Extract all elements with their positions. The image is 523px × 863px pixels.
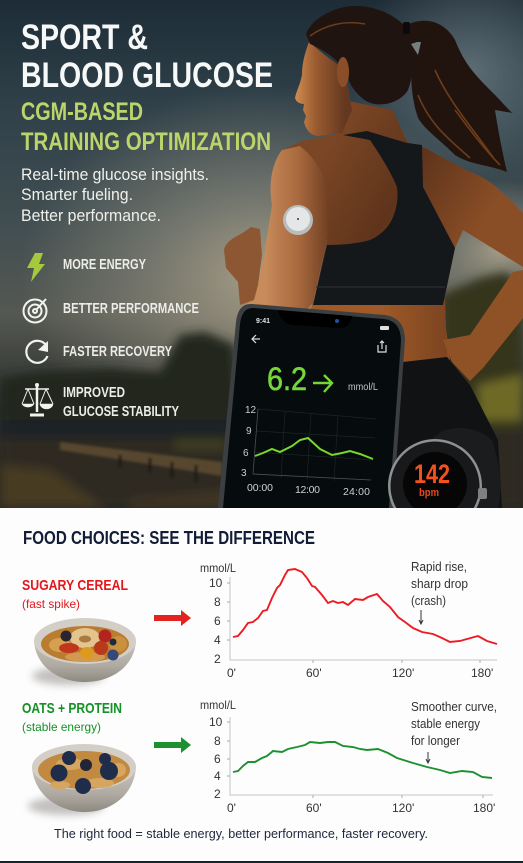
benefit: more energy — [27, 253, 146, 282]
heart rate reading: 142 — [414, 459, 450, 489]
label: oats + protein — [22, 700, 122, 734]
face and neck — [295, 42, 352, 136]
benefit: improved glucose stability: GLUCOSE STABILITY — [63, 404, 179, 420]
arrow: green — [154, 737, 191, 753]
title: SPORT & — [21, 18, 148, 57]
hand — [224, 227, 262, 305]
CGM sensor — [283, 205, 313, 235]
chart: sugary cereal: 6 — [214, 614, 221, 628]
chart: sugary cereal: 4 — [214, 633, 221, 647]
phone glucose chart: 24:00 — [343, 486, 370, 498]
bowl: sugary cereal — [32, 618, 136, 685]
watch crown — [478, 488, 487, 499]
phone glucose chart — [241, 405, 376, 498]
title — [21, 18, 273, 95]
chart: sugary cereal: 180' — [471, 666, 493, 680]
chart: oats + protein: mmol/L — [200, 698, 236, 712]
benefit: improved glucose stability — [22, 384, 179, 420]
benefit: faster recovery — [26, 341, 172, 363]
trend arrow — [313, 375, 332, 392]
unit label: mmol/L — [348, 381, 378, 393]
hero panel — [0, 0, 523, 533]
guard rail — [60, 442, 222, 482]
annotation: smoother curve: stable energy — [411, 717, 481, 731]
bowl: oats — [28, 744, 136, 815]
chart: oats + protein: 120' — [392, 801, 414, 815]
subtitle: CGM-BASED — [21, 98, 143, 126]
tagline — [21, 166, 209, 225]
bottom bar — [0, 861, 523, 863]
chart: oats + protein: 0' — [227, 801, 236, 815]
annotation: smoother curve: Smoother curve, — [411, 700, 497, 714]
chart: oats + protein — [200, 698, 497, 815]
right forearm and hand on hip — [443, 270, 523, 381]
title: BLOOD GLUCOSE — [21, 56, 273, 95]
arrow: red — [154, 610, 191, 626]
phone glucose chart: 12:00 — [295, 484, 320, 496]
chart: sugary cereal: 8 — [214, 595, 221, 609]
chart: oats + protein: 2 — [214, 787, 221, 801]
back arrow — [252, 335, 260, 343]
background: tree line and road — [0, 272, 523, 508]
label: oats + protein: (stable energy) — [22, 720, 101, 734]
waist — [300, 300, 447, 364]
bpm label: bpm — [419, 487, 439, 499]
chart: sugary cereal: 60' — [306, 666, 322, 680]
label: sugary cereal: (fast spike) — [22, 597, 80, 611]
torso and shoulders — [282, 100, 523, 364]
annotation: rapid rise: (crash) — [411, 594, 446, 608]
sports bra — [313, 131, 455, 305]
food panel — [0, 508, 523, 861]
footer statement: The right food = stable energy, better performance, faster recovery. — [54, 826, 428, 841]
phone status bar: 9:41 — [256, 318, 270, 325]
phone — [218, 304, 405, 508]
annotation: smoother curve: for longer — [411, 734, 460, 748]
phone glucose chart: 12 — [245, 405, 257, 416]
chart: oats + protein: 60' — [306, 801, 322, 815]
tagline: Better performance. — [21, 207, 161, 225]
chart: sugary cereal: 120' — [392, 666, 414, 680]
tagline: Real-time glucose insights. — [21, 166, 209, 184]
watch — [388, 428, 500, 533]
chart: oats + protein: 8 — [214, 734, 221, 748]
ear — [337, 57, 349, 87]
benefit: better performance — [24, 299, 199, 322]
benefit: more energy: MORE ENERGY — [63, 257, 146, 273]
chart: oats + protein: 6 — [214, 752, 221, 766]
left upper arm — [240, 146, 328, 320]
subtitle — [21, 98, 271, 156]
phone glucose chart: 3 — [241, 468, 247, 479]
hair — [306, 6, 412, 104]
chart: sugary cereal — [200, 560, 497, 680]
phone glucose chart: 00:00 — [247, 482, 273, 494]
chart: sugary cereal: 2 — [214, 652, 221, 666]
label: sugary cereal: SUGARY CEREAL — [22, 577, 128, 594]
chart: oats + protein: 180' — [473, 801, 495, 815]
share icon — [378, 341, 386, 352]
annotation: rapid rise — [411, 560, 468, 624]
annotation: rapid rise: sharp drop — [411, 577, 468, 591]
label: sugary cereal — [22, 577, 128, 611]
section heading: FOOD CHOICES: SEE THE DIFFERENCE — [23, 527, 315, 548]
benefit: improved glucose stability: IMPROVED — [63, 385, 125, 401]
phone glucose chart: 9 — [246, 426, 252, 437]
benefit: faster recovery: FASTER RECOVERY — [63, 344, 172, 360]
leggings — [385, 357, 502, 508]
ponytail — [405, 21, 513, 172]
woman runner — [224, 6, 523, 508]
tagline: Smarter fueling. — [21, 186, 133, 204]
chart: sugary cereal: 10 — [209, 576, 223, 590]
annotation: rapid rise: Rapid rise, — [411, 560, 467, 574]
glucose reading: 6.2 — [267, 361, 307, 397]
chart: sugary cereal: mmol/L — [200, 561, 236, 575]
label: oats + protein: OATS + PROTEIN — [22, 700, 122, 717]
chart: oats + protein: 10 — [209, 715, 223, 729]
subtitle: TRAINING OPTIMIZATION — [21, 128, 271, 156]
annotation: smoother curve — [411, 700, 497, 763]
benefit: better performance: BETTER PERFORMANCE — [63, 301, 199, 317]
phone glucose chart: 6 — [243, 448, 249, 459]
chart: sugary cereal: 0' — [227, 666, 236, 680]
hair tie — [403, 22, 410, 34]
chart: oats + protein: 4 — [214, 769, 221, 783]
